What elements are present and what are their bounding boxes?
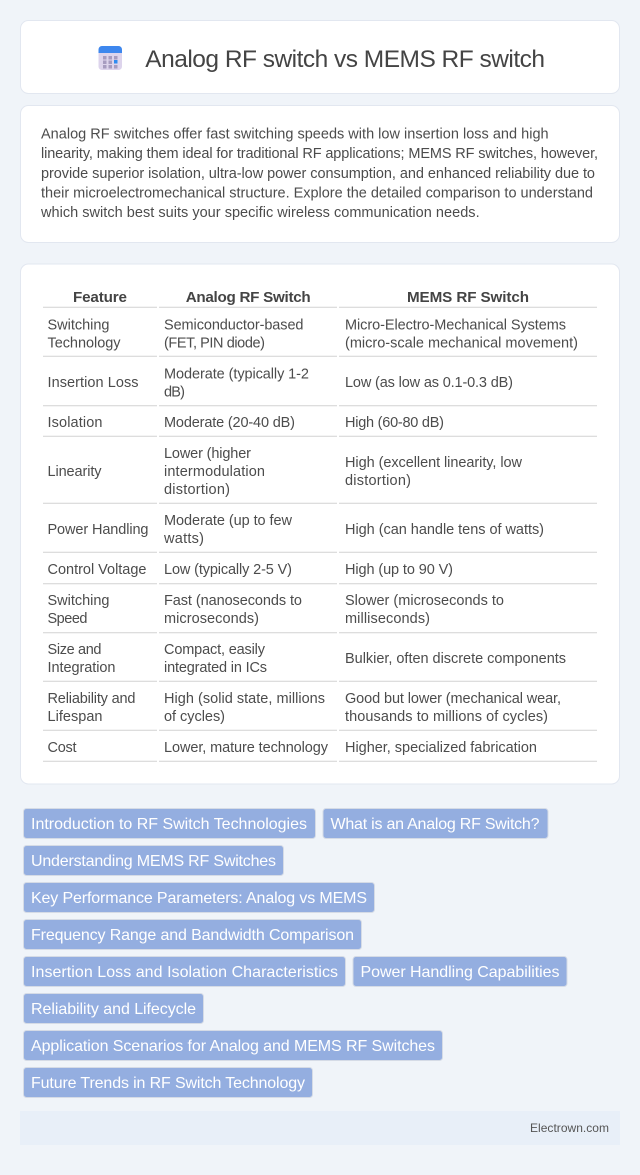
row: isolation: Isolation — [48, 415, 102, 431]
row: reliability and lifespan: Good but lower (mechanical wear, — [345, 691, 561, 707]
row: reliability and lifespan: thousands to millions of cycles) — [345, 709, 548, 725]
panel: intro text — [20, 106, 620, 242]
footer: Electrown.com — [530, 1121, 609, 1135]
row: reliability and lifespan — [48, 691, 561, 725]
row: size and integration: Integration — [48, 660, 116, 676]
row: switching technology: Switching — [48, 318, 110, 334]
row: reliability and lifespan: High (solid state, millions — [164, 691, 325, 707]
tag: understanding MEMS — [24, 846, 284, 876]
row: control voltage: Low (typically 2-5 V) — [164, 562, 292, 578]
text block: summary: Analog RF switches offer fast switching speeds with low insertion loss and high — [41, 127, 549, 143]
row: insertion loss: Moderate (typically 1-2 — [164, 367, 309, 383]
row: cost: Higher, specialized fabrication — [345, 740, 537, 756]
topic tags — [24, 808, 567, 1098]
row: insertion loss: Low (as low as 0.1-0.3 dB) — [345, 375, 513, 391]
panel: comparison table — [20, 264, 620, 784]
tag: what is analog: What is an Analog RF Switch? — [330, 816, 540, 833]
text block: summary — [40, 127, 598, 221]
row: switching speed — [48, 593, 504, 627]
row: size and integration — [48, 642, 566, 676]
footer — [20, 1111, 620, 1145]
tag: understanding MEMS: Understanding MEMS RF Switches — [31, 853, 276, 870]
table header: MEMS RF Switch — [407, 289, 529, 306]
title: Analog RF switch vs MEMS RF switch — [145, 46, 545, 73]
tag: future trends — [24, 1068, 312, 1098]
row: switching speed: milliseconds) — [345, 611, 430, 627]
row: control voltage — [48, 562, 453, 578]
row: switching technology: Semiconductor-based — [164, 318, 304, 334]
row: switching technology: Technology — [48, 336, 121, 352]
tag: insertion loss — [24, 956, 346, 986]
tag: key parameters — [24, 882, 374, 912]
row: switching speed: Slower (microseconds to — [345, 593, 504, 609]
row: switching speed: Fast (nanoseconds to — [164, 593, 302, 609]
tag: frequency range: Frequency Range and Bandwidth Comparison — [31, 927, 354, 944]
tag: application scenarios — [24, 1030, 442, 1060]
row: linearity: distortion) — [164, 482, 230, 498]
row: cost: Lower, mature technology — [164, 740, 329, 756]
row: isolation: High (60-80 dB) — [345, 415, 444, 431]
tag: power handling — [353, 956, 567, 986]
row: insertion loss: Insertion Loss — [48, 375, 138, 391]
text block: summary: their microelectromechanical structure. Explore the detailed comparison to understand — [41, 185, 593, 201]
row: power handling: High (can handle tens of watts) — [345, 522, 544, 538]
row: size and integration: Size and — [48, 642, 102, 658]
row: switching speed: Speed — [48, 611, 88, 627]
row: cost — [48, 740, 537, 756]
row: control voltage: High (up to 90 V) — [345, 562, 453, 578]
row: switching technology — [48, 318, 578, 352]
text block: summary: provide superior isolation, ultra-low power consumption, and enhanced reliability due to — [41, 166, 595, 182]
row: reliability and lifespan: of cycles) — [164, 709, 225, 725]
row: reliability and lifespan: Reliability and — [48, 691, 136, 707]
text block: summary: which switch best suits your specific wireless communication needs. — [40, 205, 480, 221]
table header — [73, 289, 529, 306]
row: insertion loss: dB) — [164, 385, 185, 401]
row: linearity: Linearity — [48, 464, 102, 480]
tag: frequency range — [24, 920, 362, 950]
icon: calendar grid — [98, 46, 122, 70]
row: size and integration: integrated in ICs — [164, 660, 267, 676]
tag: future trends: Future Trends in RF Switch Technology — [31, 1075, 305, 1092]
row: isolation: Moderate (20-40 dB) — [164, 415, 295, 431]
tag: power handling: Power Handling Capabilities — [360, 964, 560, 981]
tag: insertion loss: Insertion Loss and Isolation Characteristics — [31, 964, 338, 981]
tag: introduction — [24, 808, 316, 838]
row: switching speed: Switching — [48, 593, 110, 609]
row: power handling — [48, 513, 544, 547]
row: insertion loss — [48, 367, 513, 401]
row: cost: Cost — [48, 740, 76, 756]
tag: introduction: Introduction to RF Switch Technologies — [31, 816, 307, 833]
row: linearity — [48, 446, 523, 498]
row: reliability and lifespan: Lifespan — [48, 709, 102, 725]
tag: application scenarios: Application Scenarios for Analog and MEMS RF Switches — [31, 1038, 435, 1055]
tag: what is analog — [323, 808, 548, 838]
tag: key parameters: Key Performance Parameters: Analog vs MEMS — [31, 890, 367, 907]
tag: reliability — [24, 994, 204, 1024]
row: power handling: Moderate (up to few — [164, 513, 293, 529]
row: switching technology: Micro-Electro-Mechanical Systems — [345, 318, 566, 334]
text block: summary: linearity, making them ideal for traditional RF applications; MEMS RF switches, however, — [41, 146, 598, 162]
row: linearity: High (excellent linearity, low — [345, 455, 523, 471]
row: linearity: distortion) — [345, 473, 411, 489]
row: switching technology: (micro-scale mechanical movement) — [345, 336, 578, 352]
panel: title card — [20, 20, 620, 94]
row: switching technology: (FET, PIN diode) — [164, 336, 265, 352]
row: linearity: Lower (higher — [164, 446, 251, 462]
row: isolation — [48, 415, 444, 431]
row: power handling: Power Handling — [48, 522, 148, 538]
row: control voltage: Control Voltage — [48, 562, 146, 578]
row: switching speed: microseconds) — [164, 611, 259, 627]
tag: reliability: Reliability and Lifecycle — [31, 1001, 196, 1018]
row: size and integration: Bulkier, often discrete components — [345, 651, 566, 667]
row: size and integration: Compact, easily — [164, 642, 266, 658]
row: linearity: intermodulation — [164, 464, 265, 480]
table header: Feature — [73, 289, 127, 306]
table header: Analog RF Switch — [186, 289, 311, 306]
row: power handling: watts) — [163, 531, 204, 547]
